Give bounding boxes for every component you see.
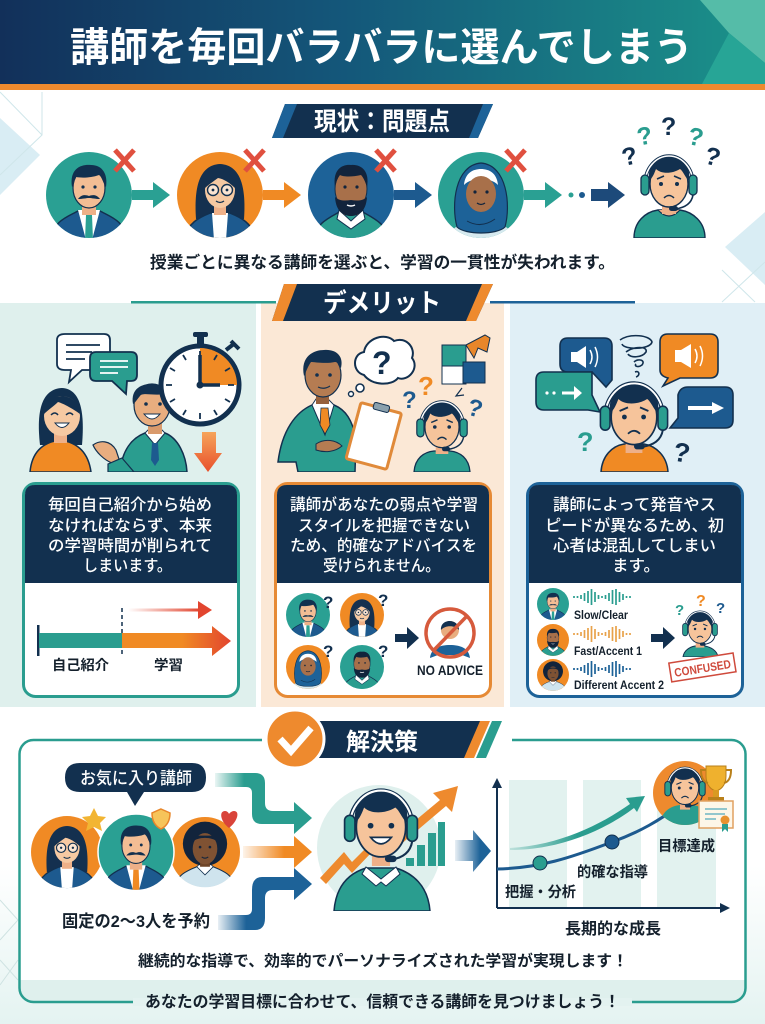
favourite teachers callout: [65, 763, 206, 806]
growth chart: 長期的な成長: [565, 919, 661, 938]
central learner with growth: [317, 785, 458, 911]
thought bubble: ?: [372, 345, 392, 381]
panel: solution frame: [20, 740, 746, 1002]
card text: 講師によって発音やス: [553, 495, 716, 514]
avatars with question marks: ?: [323, 642, 333, 661]
section heading: demerits: [131, 284, 635, 321]
card text: 受けられません。: [323, 556, 440, 575]
confused learner: ?: [685, 122, 706, 153]
card text: [48, 496, 212, 575]
teacher 4: [438, 150, 525, 240]
confused learner: ?: [619, 141, 640, 172]
arrow to chart: [455, 830, 491, 872]
panel: pronunciation differences: [528, 334, 742, 696]
arrow 1: [132, 182, 170, 208]
card text: ピードが異なるため、初: [545, 516, 724, 535]
woman smiling: [30, 388, 91, 472]
section heading: current problem: 現状：問題点: [314, 108, 450, 136]
confused stamp: CONFUSED: [673, 657, 732, 680]
decorative corners: [0, 92, 765, 302]
question marks: [402, 371, 486, 424]
panel backgrounds: [0, 303, 765, 707]
teacher 1: [46, 150, 134, 240]
clipboard: [346, 399, 403, 469]
solution background: [0, 707, 765, 1024]
speech bubbles: [57, 334, 137, 394]
timeline chart: 自己紹介: [52, 657, 109, 673]
confused learner: [600, 383, 668, 472]
card text: しまいます。: [83, 557, 172, 575]
solution caption: 継続的な指導で、効率的でパーソナライズされた学習が実現します！: [138, 951, 628, 970]
card text: 心者は混乱してしまい: [553, 537, 716, 555]
avatars with question marks: ?: [323, 593, 333, 612]
question marks: [675, 593, 725, 619]
question marks: [577, 427, 692, 469]
thought bubble: [348, 337, 415, 396]
question marks: ?: [671, 437, 692, 469]
favourite teachers callout: お気に入り講師: [80, 769, 192, 788]
booking label: 固定の2〜3人を予約: [62, 912, 210, 931]
growth arrow: [320, 786, 458, 884]
small confused learner: [683, 612, 718, 657]
confused learner: [414, 402, 470, 472]
timeline chart: 学習: [154, 657, 183, 673]
growth chart: 的確な指導: [577, 863, 648, 881]
card text: スタイルを把握できない: [298, 517, 470, 535]
avatars with question marks: ?: [378, 642, 388, 661]
voice rows: Slow/Clear: [574, 608, 628, 622]
header banner: [0, 0, 765, 90]
arrow down: [194, 432, 222, 472]
card text: なければならず、本来: [48, 517, 212, 535]
teacher 3: [308, 150, 395, 240]
teacher 2: [177, 150, 264, 240]
card text: の学習時間が削られて: [48, 536, 212, 555]
confused learner: ?: [661, 113, 676, 141]
confused learner: ?: [702, 142, 724, 173]
card text: ます。: [612, 557, 660, 575]
stopwatch: [161, 332, 239, 424]
arrow: [395, 627, 419, 649]
section heading: solution: [262, 710, 512, 768]
voice rows: Different Accent 2: [574, 678, 664, 692]
voice rows: Fast/Accent 1: [574, 644, 642, 658]
question marks: ?: [418, 371, 434, 401]
question marks: ?: [675, 602, 684, 619]
section heading: solution: 解決策: [346, 729, 418, 756]
section heading: current problem: [272, 104, 493, 138]
section heading: demerits: デメリット: [323, 288, 441, 318]
arrow 2: [263, 182, 301, 208]
chart labels: 目標達成: [658, 837, 715, 855]
voice rows: [537, 588, 664, 692]
card text: [290, 495, 478, 575]
question marks: ?: [464, 394, 486, 424]
puzzle pieces: [442, 335, 490, 396]
spiral icon: [620, 336, 652, 377]
teacher with clipboard: [278, 350, 356, 472]
decorative lower-left lines: [0, 900, 18, 985]
avatars with question marks: [286, 591, 388, 690]
male teacher gesturing: [93, 384, 187, 472]
question marks: ?: [402, 387, 417, 414]
arrow 4: [524, 182, 562, 208]
teacher sequence: [46, 150, 625, 240]
arrow: [651, 627, 675, 649]
title: 講師を毎回バラバラに選んでしまう: [70, 26, 693, 70]
growth bars: [406, 822, 445, 866]
question marks: ?: [716, 600, 725, 617]
growth chart: [492, 761, 733, 938]
question marks: ?: [696, 593, 706, 610]
card text: [545, 495, 724, 575]
no advice label: NO ADVICE: [417, 663, 483, 678]
favourite teacher avatars: [31, 808, 240, 892]
arrow 3: [394, 182, 432, 208]
card: [24, 484, 238, 696]
goal avatar with trophy: [653, 761, 733, 832]
timeline chart: [37, 601, 231, 673]
confused learner: [619, 113, 724, 238]
confused learner: ?: [635, 121, 655, 151]
panel: teacher does not know weak points: [276, 335, 490, 696]
card text: ため、的確なアドバイスを: [290, 537, 477, 555]
card text: 講師があなたの弱点や学習: [290, 495, 478, 514]
card: [528, 484, 742, 696]
speech bubbles: [536, 334, 733, 428]
no advice icon: [426, 609, 474, 658]
question marks: ?: [577, 427, 594, 457]
problem caption: 授業ごとに異なる講師を選ぶと、学習の一貫性が失われます。: [150, 252, 615, 272]
card text: 毎回自己紹介から始め: [48, 496, 212, 514]
card: [276, 484, 490, 696]
continuation dots and arrow: [568, 182, 625, 208]
avatars with question marks: ?: [378, 591, 388, 610]
flow arrows: [215, 773, 312, 930]
growth chart: 把握・分析: [505, 883, 576, 901]
panel: self introduction wastes time: [24, 332, 239, 696]
closing message: あなたの学習目標に合わせて、信頼できる講師を見つけましょう！: [145, 992, 620, 1011]
